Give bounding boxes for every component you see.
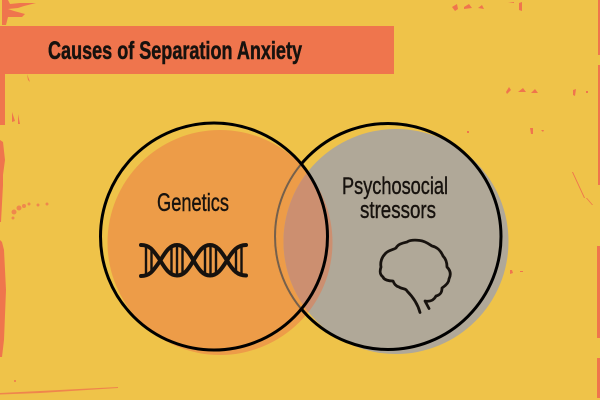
faded outline inside overlap	[274, 164, 301, 308]
icon: dna helix	[141, 245, 246, 276]
title banner	[0, 26, 394, 74]
overlap masking of outline	[274, 164, 302, 309]
title: Causes of Separation Anxiety	[48, 37, 302, 65]
label: genetics: Genetics	[157, 189, 229, 217]
icon: brain	[380, 240, 450, 312]
label: psychosocial stressors	[342, 173, 448, 224]
circle fill: genetics	[108, 130, 332, 355]
label: psychosocial stressors: Psychosocial	[342, 173, 448, 200]
outline: psychosocial circle	[275, 124, 501, 350]
venn diagram	[100, 123, 508, 355]
label: psychosocial stressors: stressors	[360, 197, 436, 224]
overlap region	[284, 174, 332, 312]
circle fill: psychosocial stressors	[284, 129, 508, 354]
outline: genetics circle	[100, 123, 328, 350]
